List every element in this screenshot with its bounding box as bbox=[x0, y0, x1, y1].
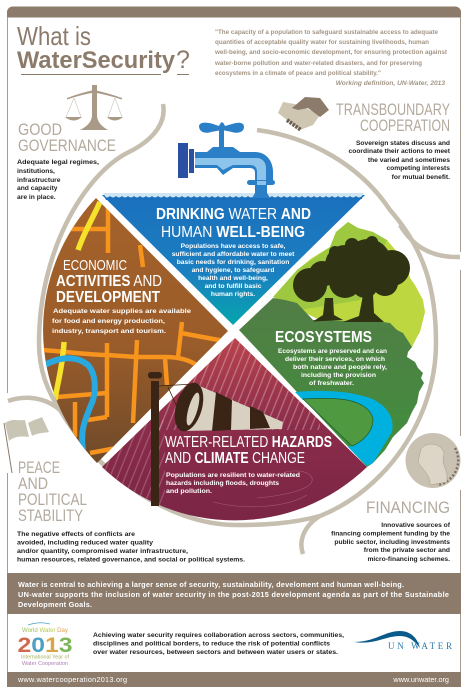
heading: economic activities: ECONOMIC bbox=[63, 257, 127, 274]
icon: tap bbox=[178, 122, 275, 198]
hatching bbox=[95, 335, 320, 505]
heading: good governance: GOOD bbox=[18, 120, 62, 139]
heading: HUMAN WELL-BEING bbox=[161, 224, 305, 241]
text: and hygiene, to safeguard bbox=[192, 267, 274, 274]
text: transboundary cooperation: the varied and sometimes bbox=[368, 157, 450, 164]
heading: peace and political stability: PEACE bbox=[18, 458, 60, 477]
heading: peace and political stability: POLITICAL bbox=[18, 490, 87, 509]
text: of freshwater. bbox=[309, 380, 354, 387]
heading bbox=[156, 206, 311, 241]
logo: world water day 2013: Water Cooperation bbox=[22, 661, 68, 667]
text: transboundary cooperation: competing interests bbox=[386, 165, 450, 172]
logo: world water day 2013: International Year of bbox=[21, 654, 69, 660]
icon: handshake bbox=[278, 97, 329, 130]
icon: coin bbox=[406, 433, 460, 488]
logo: world water day 2013: World Water Day bbox=[22, 627, 69, 634]
text: collaboration: over water resources, between sectors and between water users or states. bbox=[93, 649, 338, 656]
text: basic needs for drinking, sanitation bbox=[177, 259, 289, 266]
panel: drinking water bbox=[102, 193, 365, 325]
definition quote: quantities of acceptable quality water for sustaining livelihoods, human bbox=[215, 39, 429, 46]
heading: transboundary cooperation bbox=[336, 100, 450, 135]
heading: economic activities: DEVELOPMENT bbox=[56, 289, 160, 306]
text: economic activities: Adequate water supplies are available bbox=[53, 308, 191, 315]
text: Ecosystems are preserved and can bbox=[278, 348, 387, 355]
text: financing: financing complement funding by the bbox=[331, 530, 450, 538]
text: transboundary cooperation: for mutual benefit. bbox=[392, 174, 450, 181]
definition quote: ecosystems in a climate of peace and political stability." bbox=[215, 70, 381, 77]
text: peace and political stability bbox=[17, 531, 245, 564]
water surface bbox=[103, 193, 364, 199]
panel: economic activities bbox=[38, 198, 228, 463]
title: WaterSecurity bbox=[17, 47, 176, 74]
text: deliver their services, on which bbox=[285, 356, 385, 363]
text: peace and political stability: and/or quantity, compromised water infrastructure, bbox=[17, 548, 188, 555]
title bbox=[17, 21, 190, 74]
heading: ECOSYSTEMS bbox=[275, 329, 372, 346]
text: transboundary cooperation: coordinate their actions to meet bbox=[349, 148, 451, 155]
text: Populations are resilient to water-related bbox=[166, 472, 300, 479]
text: and pollution. bbox=[166, 488, 212, 495]
footer bar bbox=[7, 672, 461, 687]
river bbox=[295, 391, 393, 466]
panel: ecosystems bbox=[239, 222, 425, 467]
text: financing bbox=[331, 522, 451, 563]
title: ? bbox=[176, 46, 190, 74]
windsock bbox=[170, 379, 283, 435]
text: collaboration bbox=[93, 632, 344, 656]
text: economic activities: industry, transport and tourism. bbox=[52, 328, 166, 335]
text: financing: Innovative sources of bbox=[381, 522, 451, 529]
text: good governance bbox=[17, 159, 99, 201]
heading: AND CLIMATE CHANGE bbox=[165, 450, 305, 467]
text: human rights. bbox=[211, 291, 255, 298]
heading: good governance bbox=[18, 120, 116, 155]
text: hazards including floods, droughts bbox=[166, 480, 279, 487]
text: economic activities bbox=[52, 308, 191, 335]
text: good governance: Adequate legal regimes, bbox=[17, 159, 99, 166]
lawn bbox=[303, 398, 373, 446]
heading: peace and political stability: AND bbox=[18, 474, 48, 493]
heading: financing: FINANCING bbox=[366, 498, 450, 517]
logo: world water day 2013 bbox=[18, 623, 72, 667]
text: peace and political stability: The negative effects of conflicts are bbox=[17, 531, 135, 538]
title: What is bbox=[17, 21, 91, 51]
definition quote: water-borne pollution and water-related disasters, and for preserving bbox=[214, 60, 422, 67]
wave lines bbox=[213, 471, 312, 507]
text: peace and political stability: avoided, including reduced water quality bbox=[17, 540, 153, 546]
text: good governance: infrastructure bbox=[17, 177, 61, 184]
definition quote bbox=[214, 29, 448, 87]
logo: un water bbox=[354, 631, 452, 651]
definition quote: Working definition, UN-Water, 2013 bbox=[336, 80, 445, 87]
heading: good governance: GOVERNANCE bbox=[18, 136, 116, 155]
icon: flag bbox=[4, 417, 49, 473]
logo: world water day 2013: 2013 bbox=[18, 634, 72, 657]
text: transboundary cooperation: Sovereign states discuss and bbox=[356, 140, 450, 147]
band: key message: Development Goals. bbox=[18, 600, 92, 609]
windsock pole bbox=[151, 381, 159, 506]
heading bbox=[165, 434, 332, 467]
band: key message: Water is central to achieving a larger sense of security, sustainability, develoment and human well-being. bbox=[18, 580, 404, 589]
logo: un water: UN WATER bbox=[388, 641, 452, 651]
text: good governance: are in place. bbox=[17, 194, 56, 201]
text: collaboration: Achieving water security requires collaboration across sectors, communities, bbox=[93, 632, 344, 639]
heading: WATER-RELATED HAZARDS bbox=[165, 434, 332, 451]
trees bbox=[293, 236, 410, 322]
green field bbox=[239, 298, 424, 467]
definition quote: "The capacity of a population to safeguard sustainable access to adequate bbox=[215, 29, 438, 36]
text: sufficient and affordable water to meet bbox=[172, 251, 295, 258]
heading: DRINKING WATER AND bbox=[156, 206, 311, 223]
text bbox=[278, 348, 387, 387]
band: key message bbox=[7, 573, 461, 614]
text: both nature and people rely, bbox=[293, 364, 387, 371]
definition quote: well-being, and socio-economic development, for ensuring protection against bbox=[214, 49, 448, 56]
text: Populations have access to safe, bbox=[181, 243, 286, 250]
text: financing: public sector, including investments bbox=[334, 539, 450, 546]
light foliage bbox=[273, 222, 425, 350]
ring connecting the themes bbox=[8, 104, 460, 554]
text: financing: from the private sector and bbox=[364, 547, 450, 554]
heading: peace and political stability bbox=[18, 458, 87, 525]
band: key message: UN-water supports the inclusion of water security in the post-2015 development agenda as part of the Sustainable bbox=[18, 590, 449, 599]
text: including the provision bbox=[301, 372, 376, 379]
text: collaboration: disciplines and political borders, to reduce the risk of potential conflicts bbox=[93, 640, 330, 648]
text bbox=[166, 472, 300, 495]
footer bar: www.watercooperation2013.org bbox=[17, 675, 127, 684]
text: peace and political stability: human resources, related governance, and social or political systems. bbox=[17, 556, 245, 564]
icon: scales bbox=[65, 85, 123, 130]
text: economic activities: for food and energy production, bbox=[52, 318, 165, 325]
heading: economic activities: ACTIVITIES AND bbox=[56, 273, 162, 290]
roads bbox=[38, 202, 224, 453]
heading: peace and political stability: STABILITY bbox=[18, 506, 83, 525]
text: transboundary cooperation bbox=[349, 140, 451, 181]
text: and to fulfill basic bbox=[205, 283, 262, 290]
text: financing: micro-financing schemes. bbox=[367, 556, 450, 563]
text: good governance: institutions, bbox=[17, 168, 55, 175]
text: health and well-being, bbox=[198, 275, 268, 282]
text bbox=[172, 243, 295, 298]
heading: economic activities bbox=[56, 257, 162, 306]
panel: hazards bbox=[95, 335, 367, 520]
footer bar: www.unwater.org bbox=[392, 675, 449, 684]
text: good governance: and capacity bbox=[17, 185, 58, 192]
